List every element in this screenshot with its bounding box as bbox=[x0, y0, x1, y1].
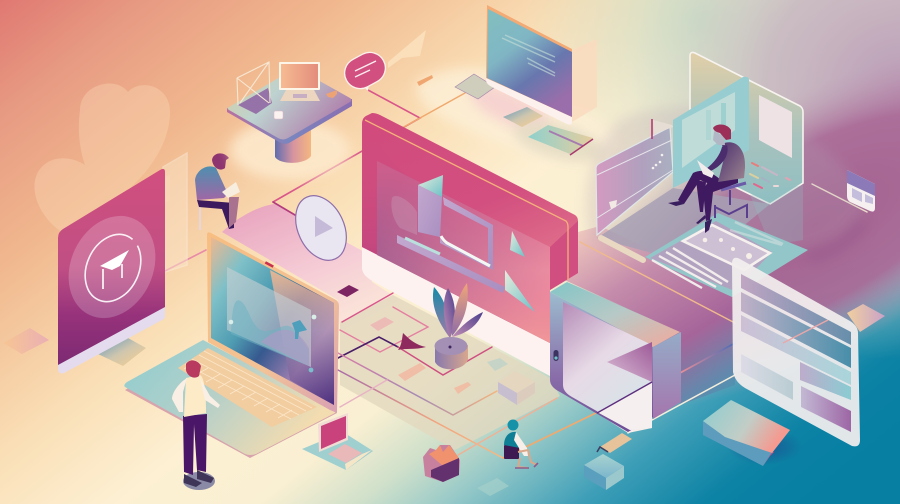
tile: dark diamond bbox=[337, 285, 359, 297]
row cell 3 bbox=[741, 315, 851, 385]
left panel marker bbox=[609, 200, 617, 209]
laptop bbox=[697, 160, 714, 178]
line: crossbar at play button bbox=[273, 202, 295, 215]
flag bbox=[652, 119, 673, 139]
line: blue pink bbox=[680, 343, 735, 373]
hair bbox=[713, 124, 731, 140]
floor: mauve floor right of central screen bbox=[560, 226, 780, 405]
column bbox=[418, 185, 442, 237]
table edge bbox=[227, 99, 352, 144]
left panel dots bbox=[652, 154, 663, 169]
logo disc bbox=[52, 202, 172, 332]
book shadow bbox=[509, 113, 607, 169]
chin bbox=[486, 76, 572, 125]
connector lines bbox=[165, 90, 867, 458]
torso bbox=[504, 432, 520, 448]
teal panel bbox=[673, 77, 749, 188]
line: floor dark purple bbox=[338, 337, 398, 358]
small sitting person bbox=[504, 420, 538, 468]
triangle small bbox=[510, 231, 525, 257]
floor: pale blob under top monitor bbox=[416, 68, 615, 158]
big laptop bbox=[124, 232, 339, 458]
legs bbox=[678, 171, 738, 221]
floor: beige platform under plant bbox=[340, 295, 560, 450]
tile: bottom pale bbox=[477, 478, 509, 496]
small laptop bbox=[302, 413, 373, 470]
line: long lower floor line bbox=[338, 370, 503, 458]
face bbox=[713, 131, 725, 145]
pink glow bbox=[463, 75, 557, 141]
plant bbox=[433, 283, 483, 369]
chart panel bbox=[227, 267, 311, 367]
line through panel bbox=[783, 320, 828, 343]
column top bbox=[418, 175, 443, 197]
cell bottom right bbox=[801, 386, 851, 432]
laptop lid bbox=[207, 232, 339, 413]
floor glow bbox=[586, 107, 865, 270]
line: orange from tablet bbox=[393, 93, 465, 133]
screen blob bbox=[391, 196, 417, 235]
keypad keys bbox=[703, 238, 752, 259]
top monitor bbox=[455, 5, 597, 155]
teal cube bbox=[584, 454, 624, 490]
inner screen bbox=[377, 161, 550, 343]
keyboard stripes bbox=[652, 222, 783, 288]
monitor screen bbox=[58, 169, 165, 365]
book bbox=[528, 125, 593, 155]
side bbox=[703, 421, 772, 466]
head bbox=[212, 153, 229, 170]
cable bbox=[597, 447, 608, 452]
note bbox=[326, 90, 337, 98]
top bbox=[703, 400, 790, 453]
small floating card bbox=[847, 170, 875, 212]
glass cube bbox=[237, 62, 272, 114]
camera bbox=[554, 350, 558, 361]
line: orange toward box bbox=[503, 411, 600, 458]
pale arrow behind bubble bbox=[388, 30, 426, 68]
back panel bbox=[690, 52, 803, 204]
peach tile behind right panel bbox=[847, 304, 885, 332]
table shadow bbox=[230, 120, 350, 180]
monitor back bbox=[572, 39, 597, 122]
shadow under top monitor and book bbox=[463, 75, 607, 169]
stool bbox=[715, 183, 747, 218]
dark line bbox=[597, 382, 652, 413]
beige cube bbox=[498, 371, 535, 405]
bottom closed box bbox=[703, 400, 803, 466]
tablet bbox=[455, 74, 495, 99]
chart area bbox=[231, 300, 309, 366]
frame inner white edge bbox=[441, 236, 490, 266]
small floor tiles bbox=[3, 75, 509, 496]
line: floor rectangle pink bbox=[342, 293, 393, 322]
line: cream lower bbox=[628, 375, 735, 433]
chart marker bbox=[292, 320, 307, 339]
right box bbox=[550, 282, 681, 433]
torso bbox=[195, 166, 228, 200]
chair bbox=[199, 207, 201, 230]
head bbox=[186, 360, 201, 378]
line: floor square pink bbox=[340, 307, 428, 352]
row cell 2 bbox=[741, 292, 851, 368]
laptop screen bbox=[211, 237, 334, 405]
line: floor pink continuation bbox=[398, 347, 492, 375]
left glass panel bbox=[596, 127, 673, 235]
keyboard bbox=[178, 348, 317, 427]
shelf bbox=[397, 235, 505, 293]
webcam bbox=[265, 261, 274, 268]
tile: floor salmon bbox=[454, 382, 471, 394]
panel body bbox=[732, 258, 860, 446]
top right scene bbox=[586, 52, 868, 297]
arm bbox=[706, 145, 728, 172]
trousers bbox=[197, 200, 234, 229]
top table bbox=[227, 62, 352, 180]
line: pale pink left bbox=[340, 380, 387, 407]
front frame bbox=[550, 292, 653, 432]
stand bbox=[503, 107, 543, 127]
head bbox=[508, 420, 518, 430]
leaves bbox=[433, 287, 450, 338]
line: long gradient floor line bbox=[338, 353, 497, 415]
legs bbox=[518, 450, 537, 468]
right edge panel bbox=[550, 221, 578, 290]
panel behind left monitor bbox=[163, 153, 187, 272]
person sitting at top left bbox=[195, 153, 240, 230]
chin bbox=[362, 245, 550, 376]
background hearts bbox=[34, 84, 170, 232]
central monitor bbox=[362, 113, 578, 376]
line: pink to left monitor bbox=[165, 250, 206, 271]
tile: floor teal bbox=[487, 358, 508, 371]
laptop base bbox=[124, 340, 336, 455]
top face bbox=[550, 282, 680, 347]
teal panel screen bbox=[682, 92, 735, 168]
desk monitor bbox=[279, 62, 320, 101]
teal panel bars bbox=[706, 103, 726, 140]
floor plate glass bbox=[750, 185, 803, 245]
monitor stand bbox=[98, 338, 146, 366]
arm right bbox=[200, 378, 220, 408]
standing person bbox=[172, 360, 220, 490]
row cell 1 bbox=[741, 274, 851, 345]
pedestal bbox=[275, 128, 311, 163]
pink wedge bbox=[763, 452, 774, 466]
monitor chin bbox=[58, 304, 165, 373]
wedge bbox=[607, 342, 652, 382]
chair back bbox=[504, 445, 519, 459]
speech bubble bbox=[339, 47, 391, 94]
laptop screen sheen bbox=[270, 270, 334, 405]
white lower wall bbox=[597, 382, 652, 430]
line: orange right floor bbox=[580, 242, 735, 323]
floor: pink zone behind laptop bbox=[222, 204, 400, 332]
tile near teal cube bbox=[600, 433, 632, 453]
frame bbox=[440, 197, 493, 270]
cream bar bbox=[601, 238, 643, 260]
cell bottom left bbox=[741, 354, 793, 400]
frame bbox=[486, 5, 572, 117]
tile: far left bbox=[3, 328, 49, 354]
shadow bbox=[727, 429, 803, 465]
chart dots bbox=[229, 315, 316, 372]
keyboard screen outline bbox=[683, 225, 770, 270]
laptop base shadow bbox=[125, 344, 337, 458]
mug bbox=[274, 111, 283, 119]
base disc bbox=[183, 472, 215, 490]
tile: floor pink bbox=[370, 317, 394, 331]
floor shadow bbox=[808, 215, 868, 262]
back panel small blocks bbox=[761, 124, 792, 137]
torso bbox=[184, 375, 206, 417]
triangle large bbox=[505, 270, 535, 312]
torso bbox=[718, 142, 745, 182]
side face bbox=[653, 332, 681, 419]
pot bbox=[435, 345, 468, 369]
line: pink from speech bubble bbox=[273, 90, 420, 202]
small laptop screen bbox=[318, 413, 348, 452]
notebook bbox=[222, 182, 240, 198]
arm left bbox=[172, 378, 187, 412]
shoes bbox=[184, 470, 214, 487]
shoes bbox=[668, 201, 712, 233]
right UI panel bbox=[732, 258, 860, 446]
small laptop base bbox=[302, 432, 373, 470]
play button bbox=[286, 187, 356, 269]
dark fin shape bbox=[398, 333, 426, 350]
back panel card bbox=[759, 95, 792, 158]
table top bbox=[228, 69, 352, 140]
mauve floor under person bbox=[597, 188, 770, 258]
tile: top center bbox=[417, 75, 433, 86]
line: cream to card bbox=[812, 184, 867, 212]
legs folded bbox=[229, 197, 239, 228]
gem bbox=[423, 445, 460, 482]
left panel lines bbox=[597, 140, 673, 218]
orange trim line bbox=[365, 120, 568, 280]
tile: floor orange bbox=[398, 363, 426, 381]
shelf teal strip bbox=[405, 238, 440, 254]
back panel list bbox=[750, 163, 790, 188]
logo ring and cap bbox=[75, 225, 151, 311]
arm bbox=[514, 432, 528, 456]
screen text lines bbox=[502, 35, 555, 76]
white base bbox=[595, 382, 652, 433]
body bbox=[362, 113, 578, 343]
line: peach bbox=[458, 398, 557, 455]
opening bbox=[563, 302, 652, 430]
left monitor bbox=[52, 153, 187, 373]
screen bbox=[487, 9, 572, 117]
cell mid right bbox=[800, 362, 851, 400]
keyboard platform bbox=[645, 213, 808, 297]
legs bbox=[183, 414, 207, 475]
